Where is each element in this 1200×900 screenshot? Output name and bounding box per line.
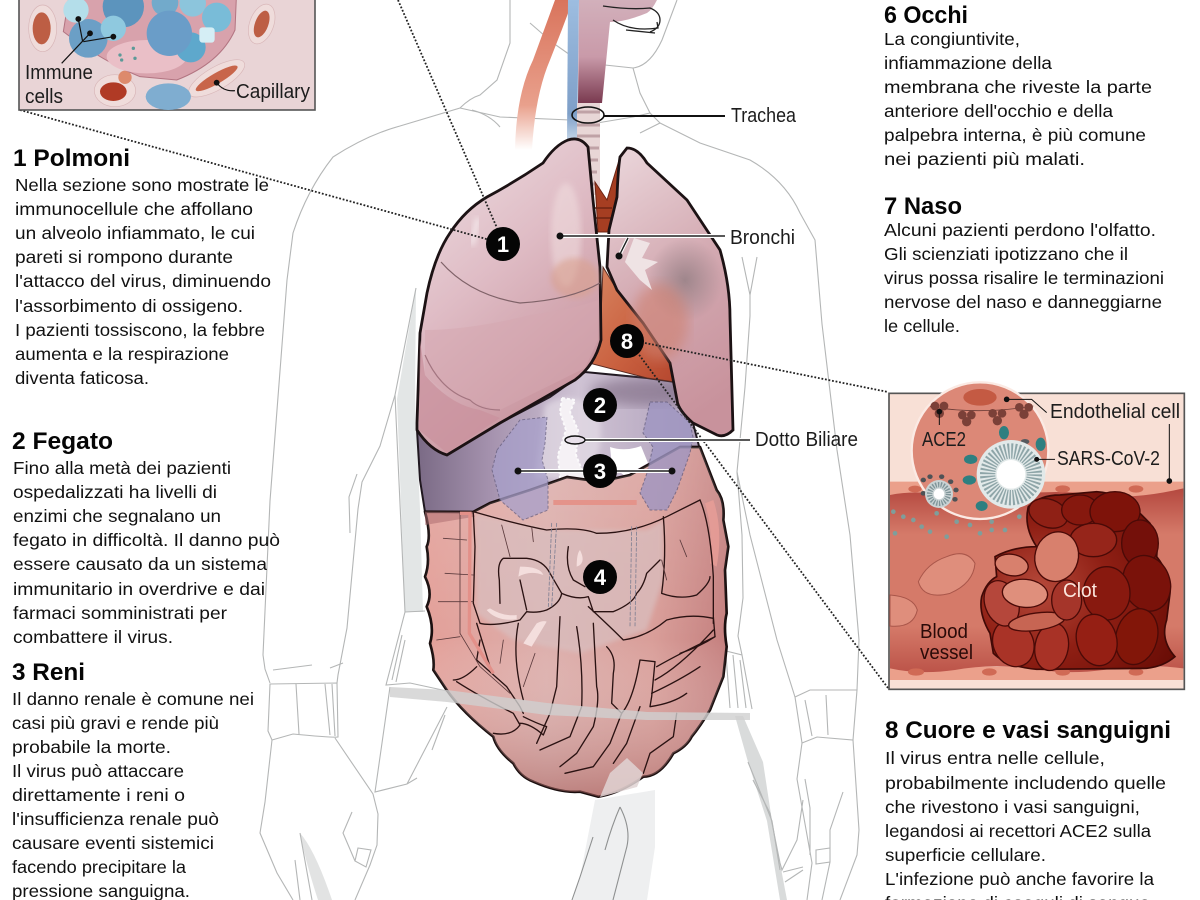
text block: 1 Polmoni: I pazienti tossiscono, la febbre bbox=[15, 320, 265, 340]
text block: 1 Polmoni: l'assorbimento di ossigeno. bbox=[15, 296, 243, 316]
text block: 1 Polmoni: Nella sezione sono mostrate le bbox=[15, 175, 269, 195]
scattered virus particles bbox=[891, 509, 1022, 539]
aorta bbox=[594, 157, 620, 232]
kidney leader bbox=[514, 468, 676, 474]
number marker 1 bbox=[486, 227, 520, 261]
number marker 2: 2 bbox=[594, 393, 606, 418]
left lung bbox=[607, 148, 733, 436]
text block: 7 Naso: Alcuni pazienti perdono l'olfatto. bbox=[884, 220, 1156, 240]
dotted connector: lung top bbox=[398, 0, 497, 228]
text block: 1 Polmoni: l'attacco del virus, diminuendo bbox=[15, 271, 271, 291]
text block: 1 Polmoni: un alveolo infiammato, le cui bbox=[15, 223, 255, 243]
capillary blobs bbox=[29, 0, 280, 107]
text block: 8 Cuore e vasi sanguigni: probabilmente includendo quelle bbox=[885, 773, 1166, 793]
text block: 3 Reni: direttamente i reni o bbox=[12, 785, 185, 805]
immune cells bbox=[63, 0, 231, 110]
body outline bbox=[260, 0, 859, 900]
label: Trachea with leader: Trachea bbox=[731, 105, 797, 127]
number marker 3: 3 bbox=[594, 459, 606, 484]
heart bbox=[585, 267, 675, 382]
clot cells bbox=[978, 492, 1178, 674]
text block: 3 Reni: casi più gravi e rende più bbox=[12, 713, 219, 733]
text block: 1 Polmoni bbox=[13, 145, 271, 388]
text block: 7 Naso: nervose del naso e danneggiarne bbox=[884, 292, 1162, 312]
text block: 1 Polmoni: pareti si rompono durante bbox=[15, 247, 233, 267]
text block: 7 Naso: 7 Naso bbox=[884, 193, 962, 220]
dotted connector: lungs to inset bbox=[20, 110, 490, 240]
inset: blood vessel with clot: Clot bbox=[1063, 580, 1097, 602]
label: Trachea with leader bbox=[572, 105, 797, 127]
text block: 3 Reni: Il virus può attaccare bbox=[12, 761, 184, 781]
inset: alveolus with immune cells: cells bbox=[25, 86, 63, 108]
label: Dotto Biliare with leader: Dotto Biliare bbox=[755, 429, 858, 451]
text block: 8 Cuore e vasi sanguigni: L'infezione può anche favorire la bbox=[885, 869, 1154, 889]
text block: 2 Fegato: Fino alla metà dei pazienti bbox=[13, 458, 231, 478]
text block: 3 Reni: l'insufficienza renale può bbox=[12, 809, 219, 829]
waistband overlay bbox=[390, 687, 750, 797]
inset: alveolus with immune cells: Immune bbox=[25, 62, 93, 84]
alveolus sac bbox=[63, 0, 237, 80]
label: Dotto Biliare with leader bbox=[565, 429, 858, 451]
text block: 6 Occhi: 6 Occhi bbox=[884, 2, 968, 29]
right lung bbox=[417, 139, 601, 455]
inset: alveolus with immune cells bbox=[19, 0, 315, 110]
esophagus and neck vessels bbox=[515, 0, 579, 150]
label: Bronchi with leader: Bronchi bbox=[730, 227, 795, 249]
vessel leader lines bbox=[937, 397, 1172, 483]
clot mass bbox=[981, 492, 1175, 669]
text block: 2 Fegato bbox=[12, 428, 280, 647]
text block: 3 Reni: 3 Reni bbox=[12, 659, 85, 686]
text block: 6 Occhi: infiammazione della bbox=[884, 53, 1052, 73]
text block: 1 Polmoni: diventa faticosa. bbox=[15, 368, 149, 388]
text block: 2 Fegato: combattere il virus. bbox=[13, 627, 173, 647]
text block: 3 Reni: facendo precipitare la bbox=[12, 857, 186, 877]
text block: 2 Fegato: farmaci somministrati per bbox=[13, 603, 227, 623]
number marker 4 bbox=[583, 560, 617, 594]
number marker 8: 8 bbox=[621, 329, 633, 354]
magnified view bbox=[912, 382, 1048, 519]
text block: 6 Occhi bbox=[884, 2, 1152, 169]
number marker 3 bbox=[583, 454, 617, 488]
text block: 7 Naso: virus possa risalire le terminazioni bbox=[884, 268, 1164, 288]
text block: 3 Reni: Il danno renale è comune nei bbox=[12, 689, 254, 709]
kidneys bbox=[492, 402, 693, 520]
wall cell nuclei bbox=[908, 485, 1143, 676]
text block: 3 Reni bbox=[12, 659, 254, 900]
text block: 2 Fegato: ospedalizzati ha livelli di bbox=[13, 482, 217, 502]
text block: 3 Reni: probabile la morte. bbox=[12, 737, 171, 757]
text block: 1 Polmoni: 1 Polmoni bbox=[13, 145, 130, 172]
number marker 4: 4 bbox=[594, 565, 607, 590]
text block: 6 Occhi: palpebra interna, è più comune bbox=[884, 125, 1146, 145]
text block: 2 Fegato: 2 Fegato bbox=[12, 428, 113, 455]
text block: 1 Polmoni: aumenta e la respirazione bbox=[15, 344, 229, 364]
intestines bbox=[425, 447, 728, 797]
dotted connector: heart to vessel box lower bbox=[637, 352, 888, 688]
text block: 2 Fegato: enzimi che segnalano un bbox=[13, 506, 221, 526]
inset: blood vessel with clot: vessel bbox=[920, 642, 973, 664]
inset: blood vessel with clot: Endothelial cell bbox=[1050, 401, 1180, 423]
text block: 7 Naso: le cellule. bbox=[884, 316, 960, 336]
text block: 6 Occhi: membrana che riveste la parte bbox=[884, 77, 1152, 97]
text block: 3 Reni: causare eventi sistemici bbox=[12, 833, 214, 853]
text block: 8 Cuore e vasi sanguigni: che rivestono i vasi sanguigni, bbox=[885, 797, 1140, 817]
text block: 6 Occhi: nei pazienti più malati. bbox=[884, 149, 1085, 169]
text block: 6 Occhi: La congiuntivite, bbox=[884, 29, 1020, 49]
lumen bbox=[890, 488, 1183, 672]
mouth bbox=[603, 6, 660, 33]
text block: 6 Occhi: anteriore dell'occhio e della bbox=[884, 101, 1113, 121]
text block: 2 Fegato: essere causato da un sistema bbox=[13, 554, 267, 574]
text block: 7 Naso bbox=[884, 193, 1164, 336]
inset: blood vessel with clot bbox=[889, 382, 1184, 689]
inset: blood vessel with clot: ACE2 bbox=[922, 429, 966, 451]
immune leader lines bbox=[62, 17, 235, 91]
free red cells bbox=[890, 554, 975, 626]
text block: 2 Fegato: fegato in difficoltà. Il danno può bbox=[13, 530, 280, 550]
vessel wall top bbox=[890, 482, 1183, 497]
text block: 8 Cuore e vasi sanguigni: Il virus entra nelle cellule, bbox=[885, 748, 1105, 768]
number marker 8 bbox=[610, 324, 644, 358]
white gap behind organs bbox=[610, 446, 648, 476]
label: Bronchi with leader bbox=[556, 227, 795, 260]
inset: blood vessel with clot: Blood bbox=[920, 621, 968, 643]
text block: 8 Cuore e vasi sanguigni: legandosi ai recettori ACE2 sulla bbox=[885, 821, 1151, 841]
text block: 2 Fegato: immunitario in overdrive e dai bbox=[13, 579, 265, 599]
text block: 8 Cuore e vasi sanguigni bbox=[885, 717, 1171, 900]
inset: blood vessel with clot: SARS-CoV-2 bbox=[1057, 448, 1160, 470]
number marker 1: 1 bbox=[497, 232, 509, 257]
dotted connector: heart to vessel box upper bbox=[645, 343, 888, 392]
trachea bbox=[577, 0, 657, 195]
text block: 8 Cuore e vasi sanguigni: superficie cellulare. bbox=[885, 845, 1046, 865]
inset: alveolus with immune cells: Capillary bbox=[236, 81, 310, 103]
text block: 7 Naso: Gli scienziati ipotizzano che il bbox=[884, 244, 1128, 264]
number marker 2 bbox=[583, 388, 617, 422]
text block: 1 Polmoni: immunocellule che affollano bbox=[15, 199, 253, 219]
text block: 8 Cuore e vasi sanguigni: 8 Cuore e vasi sanguigni bbox=[885, 717, 1171, 744]
abdomen purple: liver and stomach bbox=[417, 372, 712, 520]
vessel wall bottom bbox=[890, 667, 1183, 680]
